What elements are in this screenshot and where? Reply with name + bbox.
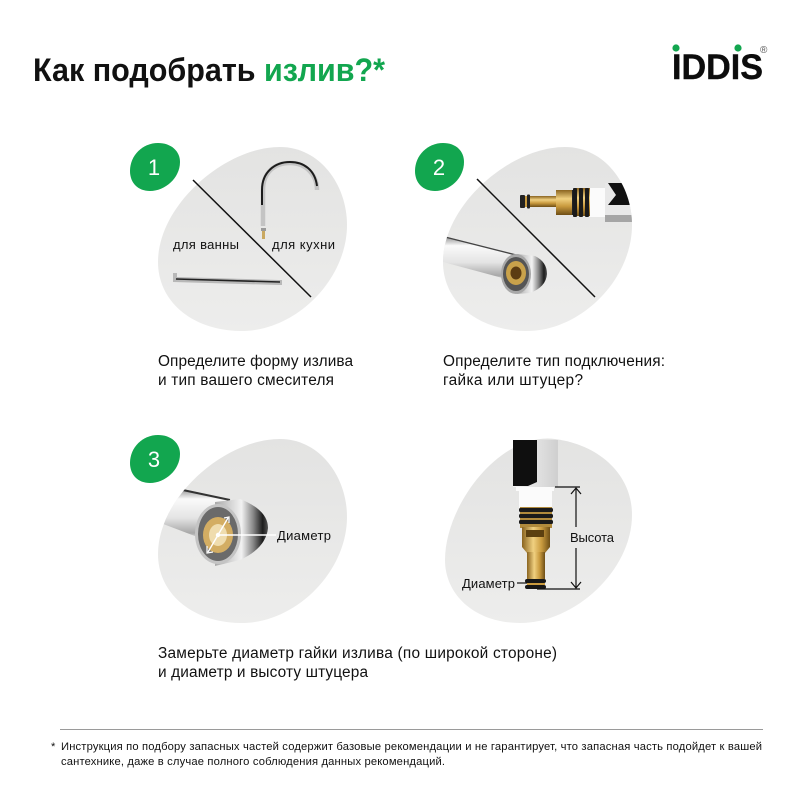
blob 4 <box>445 439 632 623</box>
step 3 caption: и диаметр и высоту штуцера <box>158 664 368 681</box>
logo: IDDIS: IDDIS <box>672 48 763 87</box>
label: diameter: Диаметр <box>462 576 515 591</box>
label: diameter: Диаметр <box>277 528 331 543</box>
divider line 1 <box>193 180 311 297</box>
panel: step 2 <box>415 143 635 331</box>
badge 1: 1 <box>148 155 160 180</box>
step 2 caption: Определите тип подключения: <box>443 353 665 370</box>
panel: step 3 left <box>130 435 347 623</box>
nut spout photo <box>443 236 547 294</box>
title: Как подобрать излив?* <box>33 52 385 88</box>
fitting photo vertical <box>513 440 558 589</box>
blob 2 <box>443 147 632 331</box>
leader line <box>218 534 276 536</box>
badge 2 <box>415 143 464 191</box>
step 1 caption: и тип вашего смесителя <box>158 372 334 389</box>
label: bath: для ванны <box>173 237 239 252</box>
badge 3 <box>130 435 180 483</box>
blob 1 <box>158 147 347 331</box>
panel: step 3 right <box>445 439 632 623</box>
label: height: Высота <box>570 530 615 545</box>
step 2 caption: гайка или штуцер? <box>443 372 583 389</box>
nut photo <box>158 488 268 566</box>
panel: step 1 <box>130 143 347 331</box>
badge 1 <box>130 143 180 191</box>
step 1 caption: Определите форму излива <box>158 353 353 370</box>
logo: IDDIS: ® <box>760 45 768 56</box>
fitting photo <box>520 183 635 222</box>
bath spout <box>173 273 282 285</box>
footnote: сантехнике, даже в случае полного соблюдения данных рекомендаций. <box>61 756 445 768</box>
footnote: Инструкция по подбору запасных частей содержит базовые рекомендации и не гарантирует, что запасная часть подойдет к вашей <box>61 741 762 753</box>
footnote: * <box>51 741 56 753</box>
step 3 caption: Замерьте диаметр гайки излива (по широкой стороне) <box>158 645 557 662</box>
badge 2: 2 <box>433 155 445 180</box>
badge 3: 3 <box>148 447 160 472</box>
kitchen spout <box>261 162 317 239</box>
height dimension <box>537 487 581 589</box>
blob 3 <box>158 439 347 623</box>
diameter tick <box>517 582 527 584</box>
label: kitchen: для кухни <box>272 237 335 252</box>
divider line 2 <box>477 179 595 297</box>
